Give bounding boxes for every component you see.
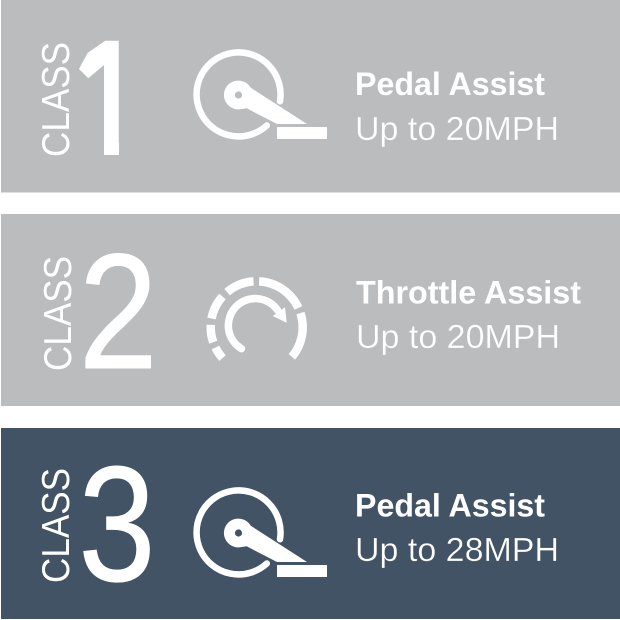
icon: pedal crank [197, 52, 327, 139]
class label: CLASS: CLASS [35, 42, 78, 157]
class label: CLASS: CLASS [37, 256, 80, 371]
panel: class 2 [1, 214, 620, 406]
text: pedal assist: Pedal Assist [355, 488, 545, 524]
text: throttle assist: Throttle Assist [356, 274, 581, 310]
icon: throttle gauge [211, 281, 303, 358]
panel: class 1 [1, 0, 620, 192]
panel: class 3 [1, 428, 620, 619]
text: speed: Up to 20MPH [355, 110, 559, 147]
class number 1 [79, 40, 119, 155]
class label: CLASS: CLASS [35, 468, 78, 583]
text: speed: Up to 28MPH [355, 531, 559, 568]
icon: pedal crank [197, 490, 327, 577]
text: pedal assist: Pedal Assist [355, 66, 545, 102]
class number 3: 3 [78, 432, 156, 616]
text: speed: Up to 20MPH [356, 318, 560, 355]
class number 1: 1 [62, 6, 155, 191]
class number 2: 2 [79, 220, 158, 403]
